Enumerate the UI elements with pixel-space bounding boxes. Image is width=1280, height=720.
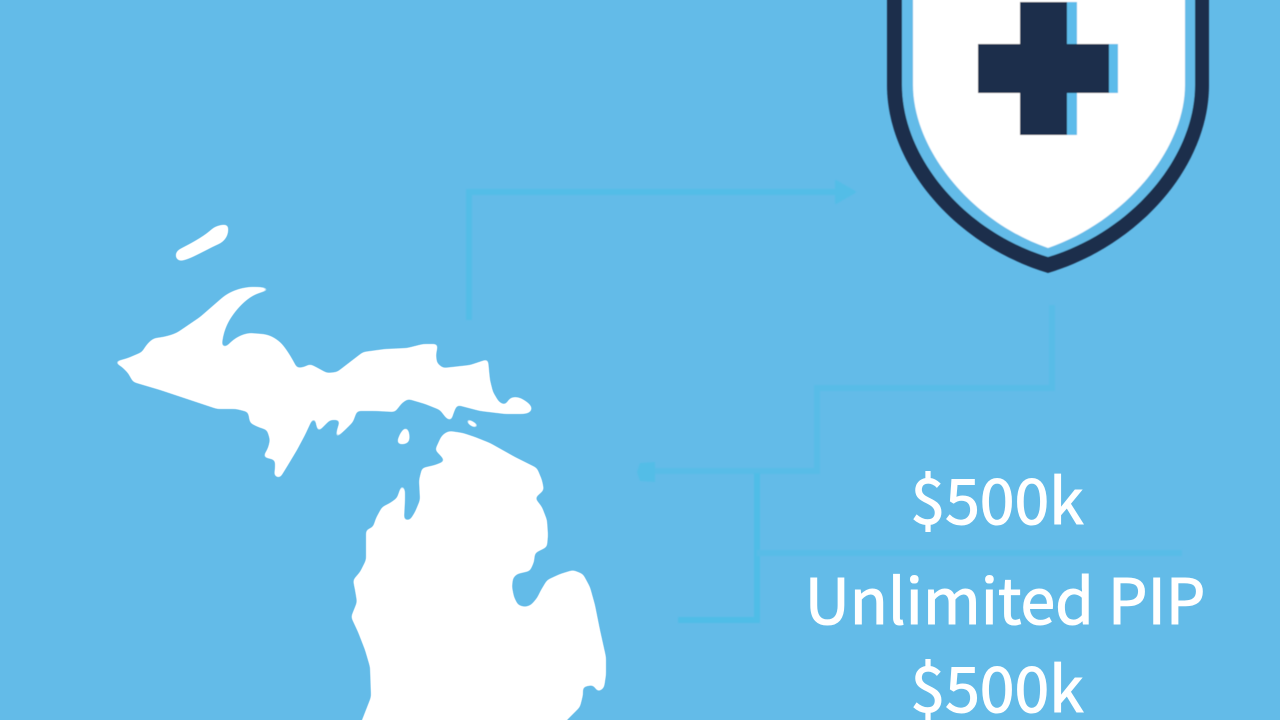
arrow head (836, 181, 855, 203)
coverage text (805, 451, 1205, 720)
small island: Beaver (397, 428, 410, 444)
connector: top arrow to shield (469, 181, 855, 320)
Lower Peninsula (351, 431, 606, 720)
map: Michigan (114, 225, 606, 720)
label: top tier: $500k (910, 451, 1084, 542)
connector node (637, 462, 655, 482)
connector: shield to coverage tiers (637, 305, 1182, 620)
cross (978, 2, 1109, 135)
cross shadow (1030, 2, 1118, 135)
icon: medical shield (887, 0, 1209, 273)
label: PIP tier: Unlimited PIP (805, 551, 1205, 642)
Isle Royale (176, 225, 228, 261)
Upper Peninsula (114, 287, 532, 478)
small island: Bois Blanc (466, 419, 479, 428)
